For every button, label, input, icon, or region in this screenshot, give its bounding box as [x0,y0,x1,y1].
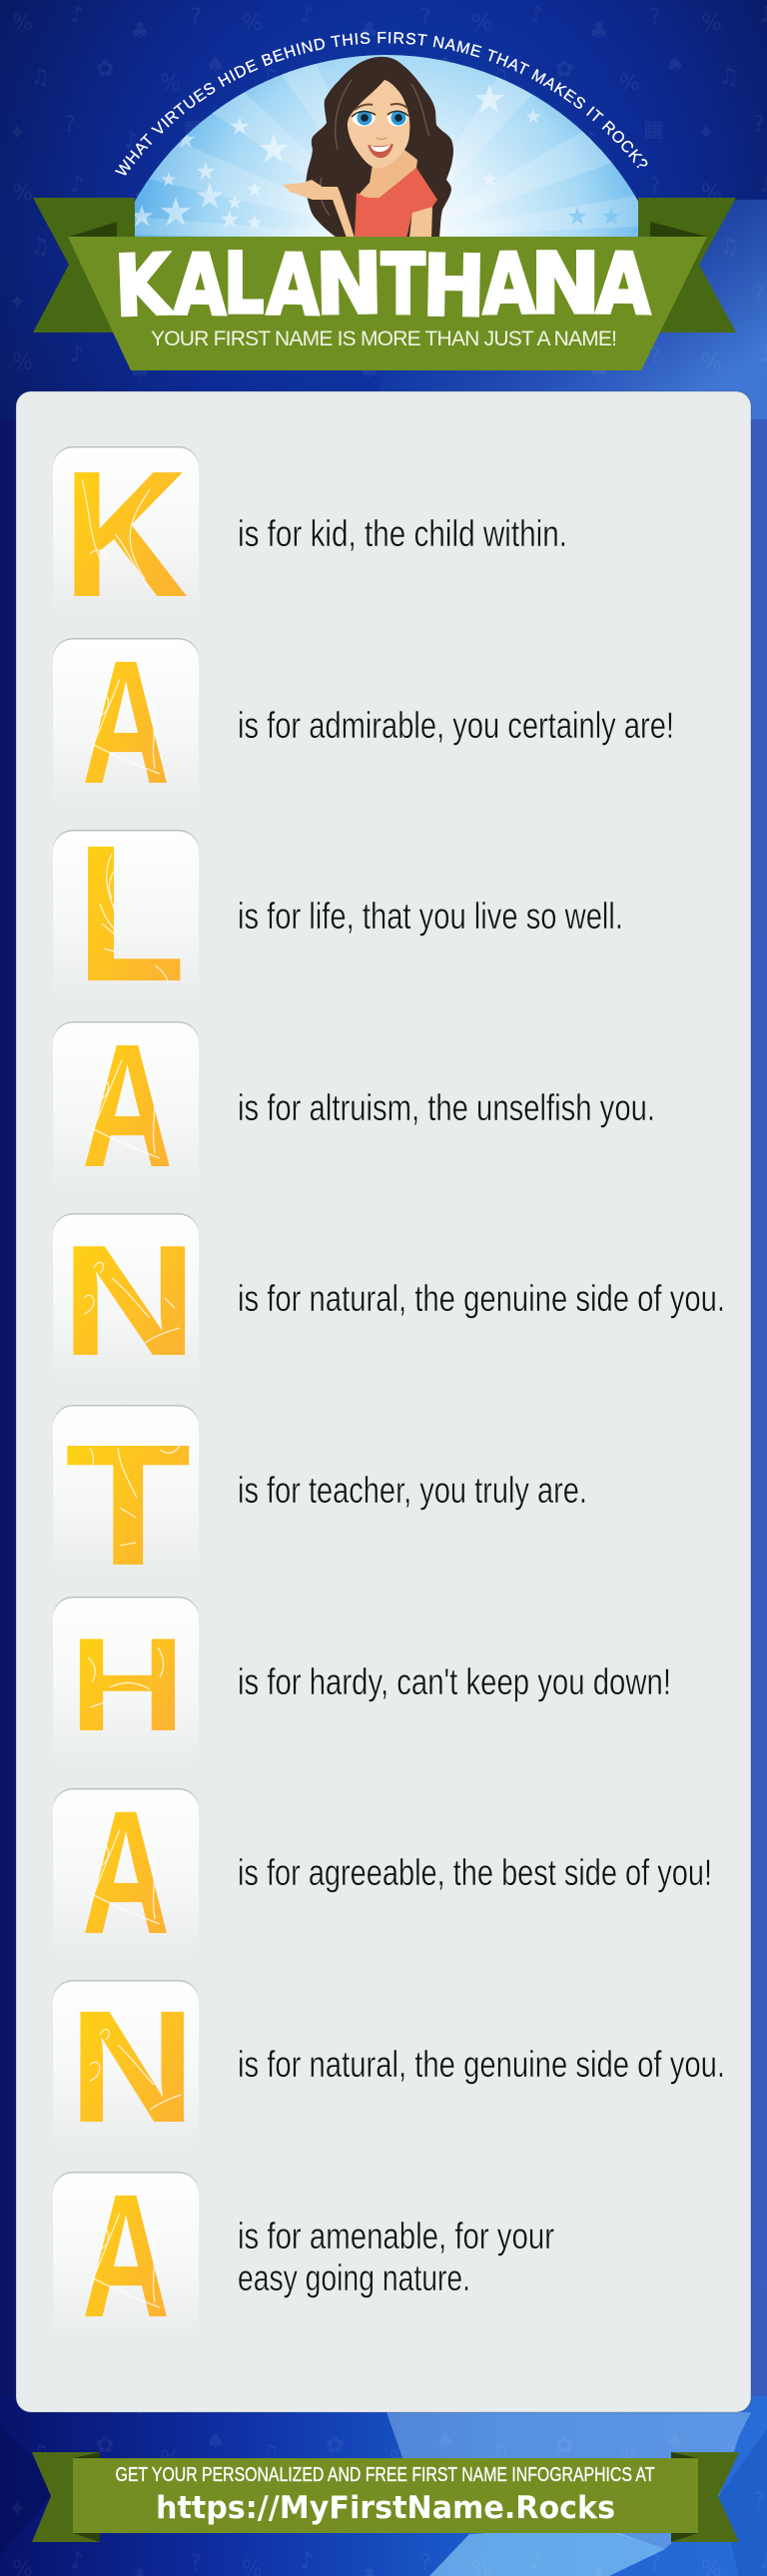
name title: H [421,237,486,335]
mouth [368,144,393,158]
row A: is for altruism, the unselfish you. [238,1087,655,1128]
row K: is for kid, the child within. [238,513,567,554]
ribbon front [68,237,707,370]
name title: N [315,236,384,333]
hair highlights [320,80,429,216]
footer folds [73,2452,698,2542]
row L: L [76,804,186,1022]
subtitle: YOUR FIRST NAME IS MORE THAN JUST A NAME! [151,327,617,350]
nose [377,138,386,140]
footer tail right [671,2452,739,2542]
row A [53,1007,655,1204]
name title: T [382,236,425,333]
header illustration: sky dome with rays and stars [135,55,638,237]
left arm and hand [283,180,355,238]
name title: A [173,237,228,335]
arched tagline: WHAT VIRTUES HIDE BEHIND THIS FIRST NAME THAT MAKES IT ROCK? [115,32,647,176]
ribbon fold right [650,222,707,237]
row T: is for teacher, you truly are. [238,1470,587,1511]
row H [53,1597,671,1773]
footer ribbon [32,2452,739,2542]
row A [53,2159,554,2354]
row N [53,1977,725,2157]
ribbon tail left [33,198,135,332]
right arm [409,207,432,238]
eye left [352,105,376,126]
row N [53,1213,725,1390]
row A: A [82,625,170,821]
row K: K [63,433,188,635]
name title: L [224,235,264,332]
row H: H [69,1611,186,1759]
row A: easy going nature. [238,2257,470,2298]
row N: N [69,1977,196,2156]
eye right [387,104,408,126]
name title: K [113,237,176,335]
row A: is for amenable, for your [238,2216,554,2256]
name title: A [481,236,536,334]
shirt [355,168,437,238]
row A: A [82,1007,173,1204]
row A: A [82,1775,170,1971]
row L: is for life, that you live so well. [238,896,623,937]
hair [306,57,453,238]
row T: T [65,1409,191,1602]
face [348,80,409,169]
footer url: https://MyFirstName.Rocks [156,2490,615,2526]
icon: cartoon woman [283,57,453,238]
panel: letter list [16,391,751,2412]
name title: A [595,236,652,334]
row A [53,1775,712,1971]
name title [113,235,652,335]
ribbon fold left [69,222,117,237]
header ribbon [33,198,736,370]
name title: N [530,235,600,332]
row A [53,625,674,821]
row T [53,1405,587,1602]
row L [53,804,623,1022]
footer front [73,2458,698,2533]
row A: A [82,2159,170,2354]
row K [53,433,567,635]
ribbon tail right [638,198,736,332]
neck and chest [357,150,417,198]
row N: N [61,1213,198,1389]
name title: A [266,237,321,335]
footer tail left [32,2452,100,2542]
